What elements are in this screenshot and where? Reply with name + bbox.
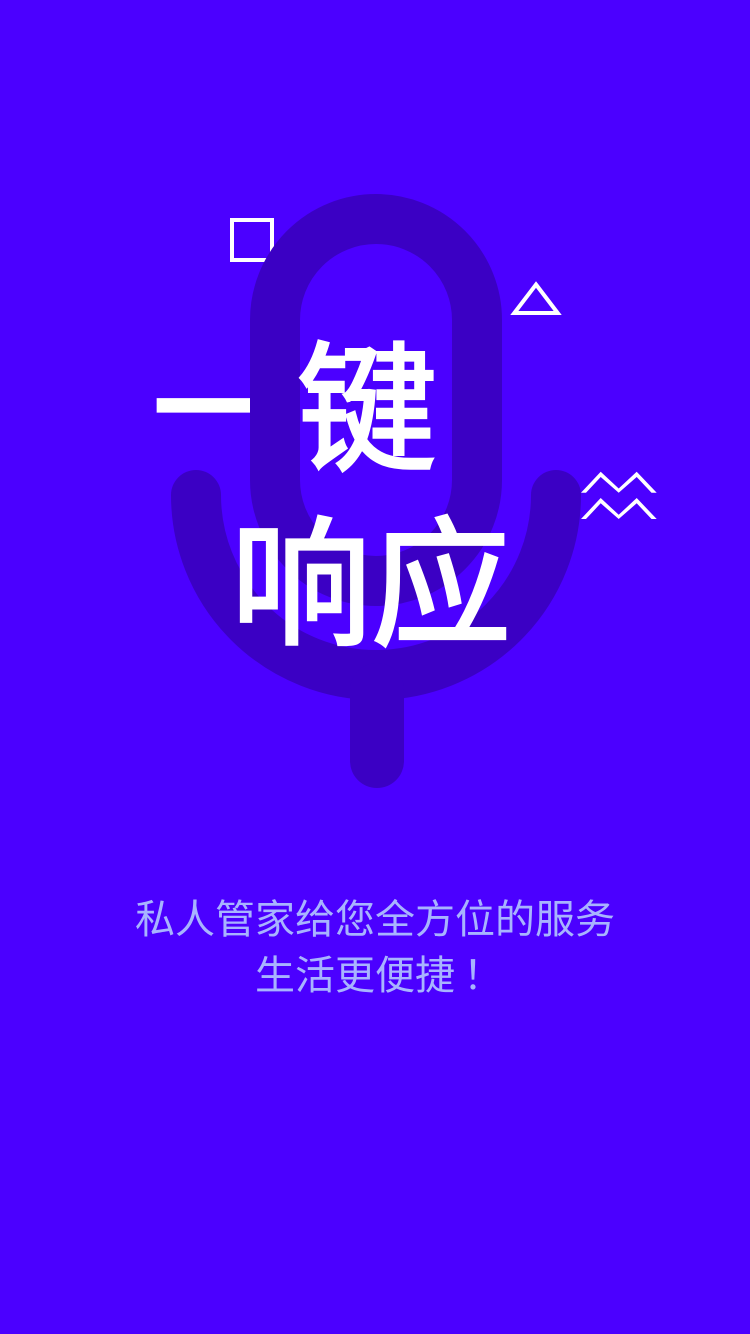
icon: double zigzag xyxy=(581,472,657,519)
icon: microphone xyxy=(196,219,556,761)
subtitle text xyxy=(135,898,615,998)
subtitle text: 私人管家给您全方位的服务 xyxy=(135,898,615,942)
title character: yi: 一 xyxy=(152,333,292,490)
icon: hollow square xyxy=(232,220,272,260)
title line: xiangying: 响应 xyxy=(231,507,511,664)
icon: hollow triangle xyxy=(514,284,558,313)
subtitle text: 生活更便捷！ xyxy=(255,954,503,998)
title character: jian: 键 xyxy=(297,332,437,489)
